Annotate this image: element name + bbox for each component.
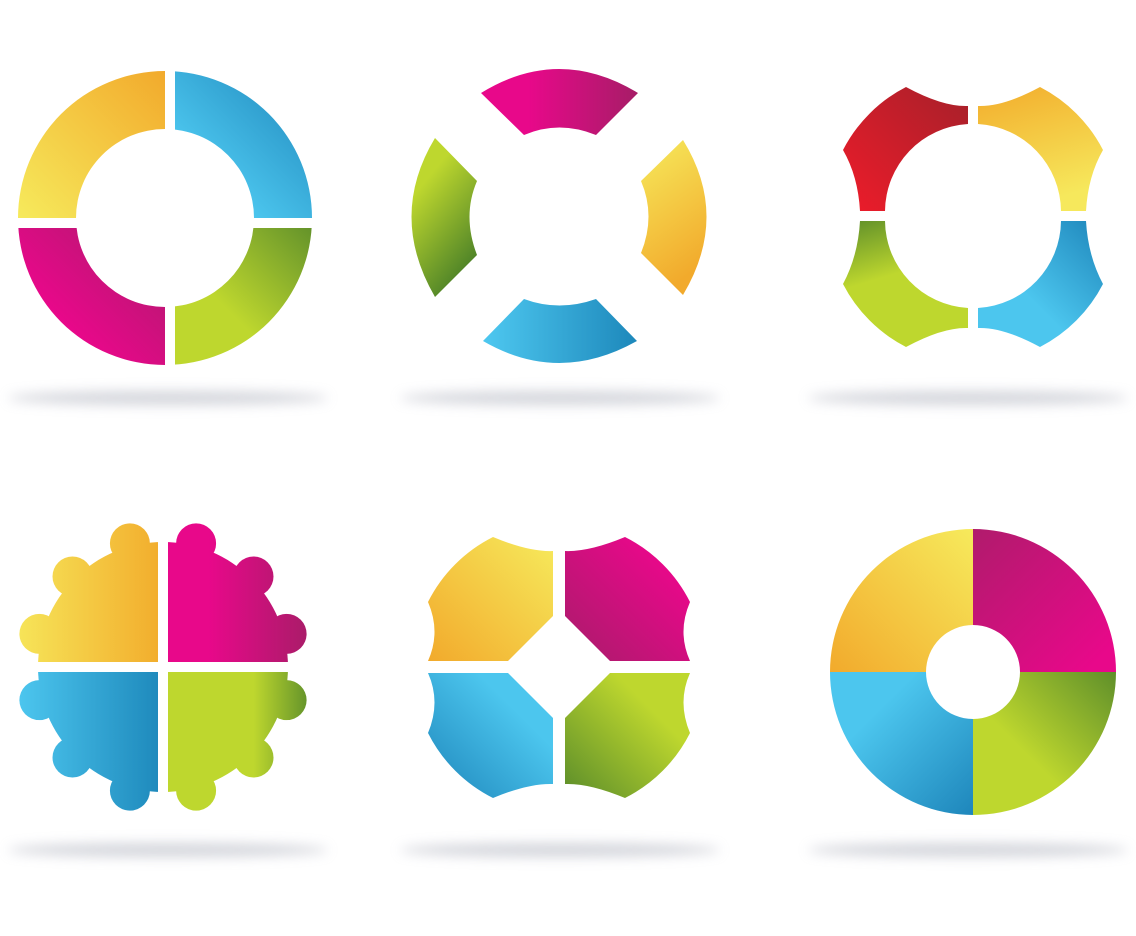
chart: segmented ring — [15, 68, 315, 368]
chart: gear quadrants — [14, 516, 314, 818]
shadows — [8, 391, 1128, 857]
chart: lifebuoy segments — [412, 69, 706, 363]
chart: shield quadrants with diamond center — [428, 537, 690, 798]
chart: concave ring — [843, 87, 1103, 347]
chart: donut quadrants — [830, 529, 1116, 815]
